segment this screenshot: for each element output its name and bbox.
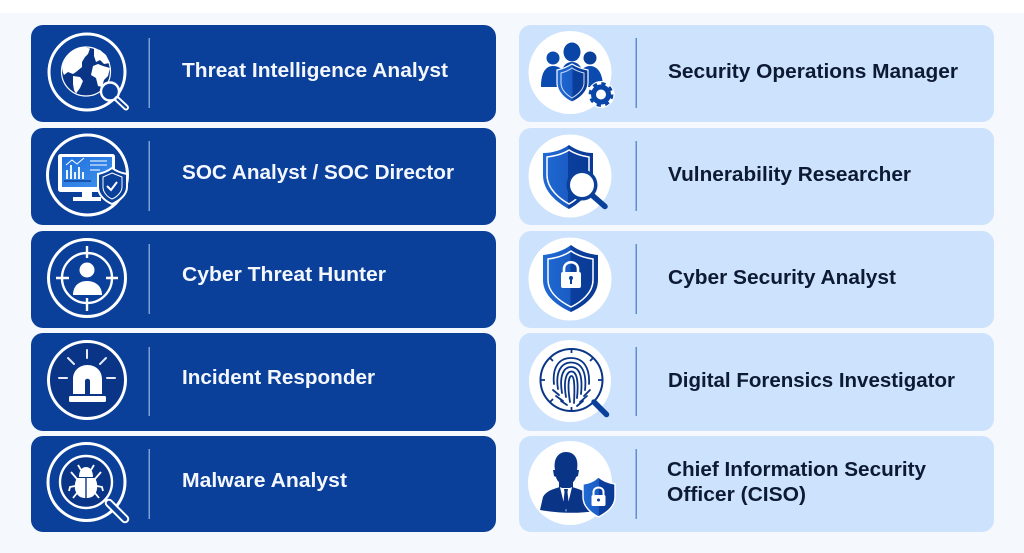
divider: [636, 38, 637, 108]
icon: team with shield and gear: [528, 31, 614, 114]
panel: Malware Analyst: [31, 436, 496, 532]
icon: monitor with shield: [48, 135, 128, 215]
label: Digital Forensics Investigator: [668, 370, 955, 392]
panel: Chief Information Security Officer: [519, 436, 994, 532]
divider: [148, 244, 150, 314]
label: Officer (CISO): [667, 484, 806, 506]
label: Cyber Threat Hunter: [182, 264, 386, 286]
label: [667, 459, 927, 506]
panel: Incident Responder: [31, 333, 496, 431]
divider: [148, 347, 150, 416]
icon: shield with magnifier: [528, 134, 612, 218]
label: Incident Responder: [182, 367, 375, 389]
icon: bug under magnifier: [48, 444, 125, 520]
icon: target with person: [48, 240, 126, 316]
icon: globe with magnifier: [49, 34, 126, 110]
icon: executive with shield: [528, 441, 615, 525]
divider: [636, 449, 637, 519]
panel: Cyber Security Analyst: [519, 231, 994, 328]
divider: [148, 449, 150, 519]
panel: Vulnerability Researcher: [519, 128, 994, 225]
label: Security Operations Manager: [668, 61, 958, 83]
label: Vulnerability Researcher: [668, 164, 911, 186]
label: SOC Analyst / SOC Director: [182, 162, 454, 184]
icon: shield with padlock: [528, 238, 612, 320]
label: Threat Intelligence Analyst: [182, 60, 448, 82]
panel: Digital Forensics Investigator: [519, 333, 994, 431]
label: Cyber Security Analyst: [668, 267, 896, 289]
panel: Threat Intelligence Analyst: [31, 25, 496, 122]
divider: [636, 141, 637, 211]
label: Chief Information Security: [667, 459, 927, 481]
divider: [148, 141, 150, 211]
panel: SOC Analyst / SOC Director: [31, 128, 496, 225]
icon: alarm beacon: [48, 342, 126, 418]
icon: fingerprint in magnifier: [529, 340, 611, 422]
label: Malware Analyst: [182, 470, 347, 492]
divider: [636, 347, 637, 416]
divider: [148, 38, 150, 108]
divider: [636, 244, 637, 314]
panel: Cyber Threat Hunter: [31, 231, 496, 328]
panel: Security Operations Manager: [519, 25, 994, 122]
